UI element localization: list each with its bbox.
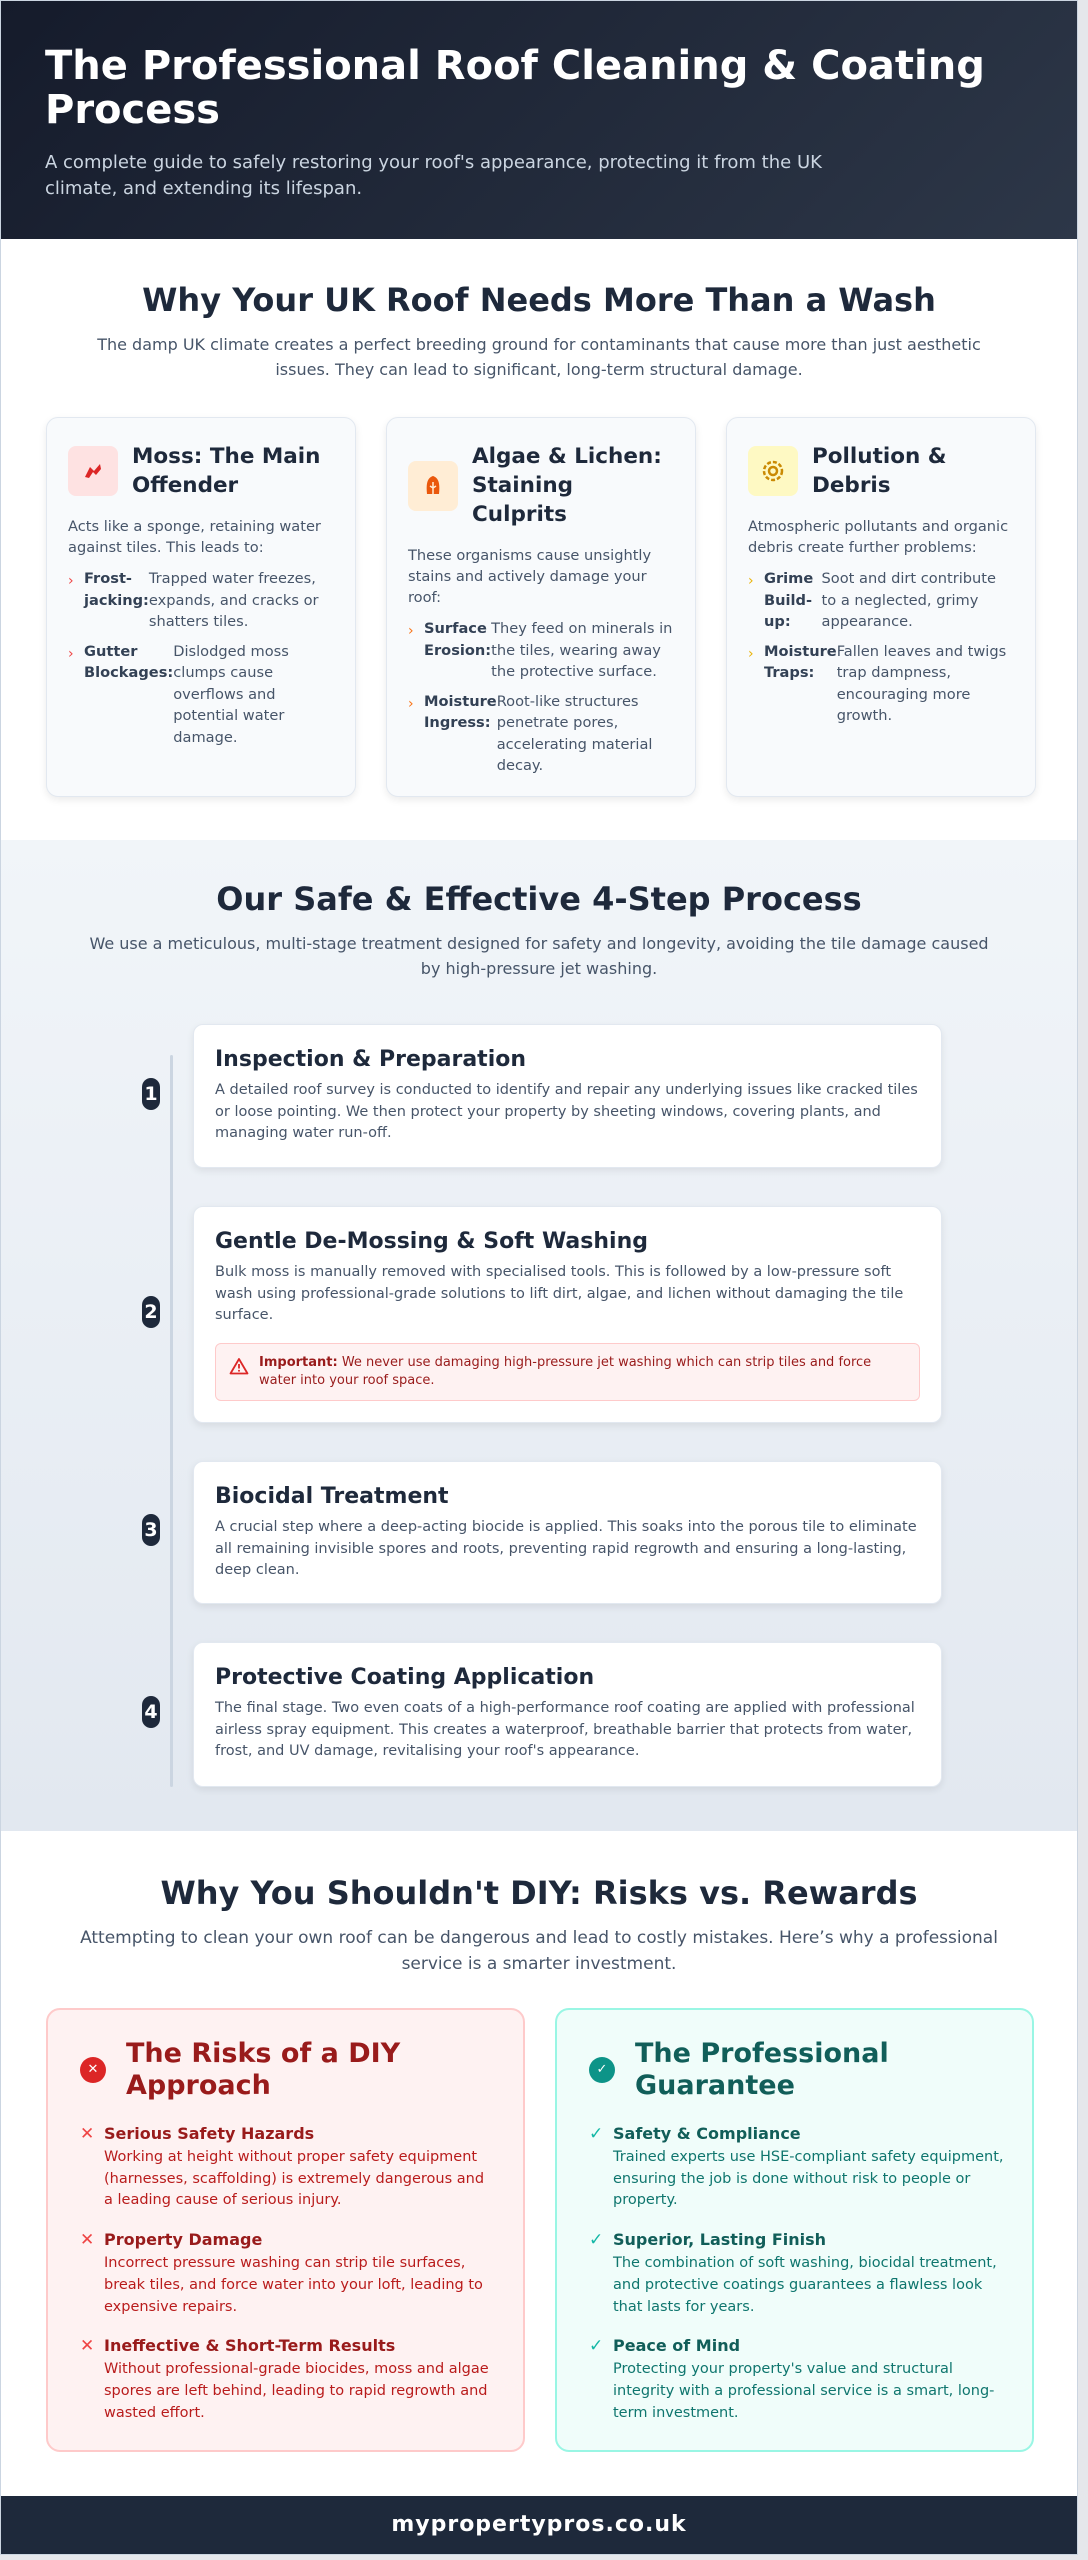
footer [1,2496,1077,2554]
title: The Professional Roof Cleaning & Coating Process [45,43,985,133]
card: algae: They feed on minerals in the tiles, wearing away the protective surface. [491,620,672,680]
card: moss: Frost-jacking: [84,570,149,608]
risk item: ✕ [80,2336,94,2356]
step 1 number: 1 [144,1083,158,1105]
risk item: Ineffective & Short-Term Results [104,2336,395,2355]
risk item: ✕ [80,2230,94,2250]
card: algae: Root-like structures penetrate pores, accelerating material decay. [497,692,652,774]
benefit item: Protecting your property's value and structural integrity with a professional service is a smart, long-term investment. [613,2361,994,2421]
risk item: Serious Safety Hazards [104,2124,314,2143]
risk item: Incorrect pressure washing can strip tile surfaces, break tiles, and force water into your loft, leading to expensive repairs. [104,2255,483,2315]
risk item: Working at height without proper safety equipment (harnesses, scaffolding) is extremely dangerous and a leading cause of serious injury. [104,2149,484,2208]
step 4 card: Protective Coating Application [215,1665,594,1690]
benefit item: ✓ [589,2124,603,2144]
callout: important warning: Important: We never use damaging high-pressure jet washing which can strip tiles and force water into your roof space. [259,1354,871,1388]
step 3 number [142,1514,160,1546]
step 2 number [142,1296,160,1328]
card: moss: › [68,646,74,662]
step 3 card: Biocidal Treatment [215,1484,449,1509]
step 1 number [142,1078,160,1110]
card: pollution: Soot and dirt contribute to a neglected, grimy appearance. [822,570,996,630]
card: moss [46,417,356,797]
subtitle: A complete guide to safely restoring your roof's appearance, protecting it from the UK climate, and extending its lifespan. [45,152,822,199]
benefit item [589,2230,997,2315]
panel: professional guarantee [555,2008,1034,2452]
panel: risks: The Risks of a DIY Approach [126,2038,400,2101]
card: algae: Algae & Lichen: Staining Culprits [472,444,662,527]
step 1 card: Inspection & Preparation [215,1047,526,1072]
icon: algae [408,460,458,510]
card: moss: Dislodged moss clumps cause overflows and potential water damage. [173,642,289,746]
card: pollution: › [748,646,754,662]
card: moss: Trapped water freezes, expands, and cracks or shatters tiles. [149,570,319,630]
risk item [80,2336,489,2421]
intro text: Attempting to clean your own roof can be dangerous and lead to costly mistakes. Here’s why a professional service is a smarter investment. [80,1928,998,1974]
header [1,1,1077,239]
card: pollution: Atmospheric pollutants and organic debris create further problems: [748,518,1008,556]
step 2 card: Bulk moss is manually removed with specialised tools. This is followed by a low-pressure soft wash using professional-grade solutions to lift dirt, algae, and lichen without damaging the tile surface. [215,1264,903,1323]
card: pollution: Moisture Traps: [764,642,837,681]
benefit item: Safety & Compliance [613,2124,801,2143]
step 3 card: A crucial step where a deep-acting biocide is applied. This soaks into the porous tile to eliminate all remaining invisible spores and roots, preventing rapid regrowth and ensuring a long-lasting, deep clean. [215,1519,917,1578]
timeline [142,1024,942,1790]
step 4 number: 4 [144,1701,158,1723]
card: pollution: Fallen leaves and twigs trap dampness, encouraging more growth. [837,642,1006,724]
section: 4-step process [1,840,1077,1831]
card: algae: › [408,696,414,712]
benefit item: Superior, Lasting Finish [613,2230,826,2249]
step 4 number [142,1696,160,1728]
section: DIY risks vs rewards [46,1874,1034,2452]
card: moss: Moss: The Main Offender [132,444,320,498]
card: pollution [726,417,1036,797]
benefit item: Peace of Mind [613,2336,740,2355]
step 2 card [193,1206,942,1423]
icon: check circle: ✓ [597,2062,607,2077]
step 2 card: Gentle De-Mossing & Soft Washing [215,1229,648,1254]
panel: risks [46,2008,525,2452]
card: moss: › [68,573,74,589]
icon: check circle [589,2057,615,2083]
intro text: The damp UK climate creates a perfect breeding ground for contaminants that cause more than just aesthetic issues. They can lead to significant, long-term structural damage. [97,335,981,379]
risk item [80,2230,483,2315]
risk item: Property Damage [104,2230,262,2249]
section: why your roof needs more [46,281,1036,800]
icon: x circle: ✕ [88,2062,98,2077]
icon: x circle [80,2057,106,2083]
risk item: Without professional-grade biocides, moss and algae spores are left behind, leading to rapid regrowth and wasted effort. [104,2361,489,2421]
card: algae: › [408,623,414,639]
intro text: We use a meticulous, multi-stage treatment designed for safety and longevity, avoiding the tile damage caused by high-pressure jet washing. [89,934,989,978]
step 3 number: 3 [144,1519,158,1541]
risk item [80,2124,484,2208]
card: moss: Acts like a sponge, retaining water against tiles. This leads to: [68,518,321,556]
callout: important warning [215,1342,920,1400]
card: algae: Surface Erosion: [424,620,491,658]
footer: mypropertypros.co.uk [391,2512,687,2537]
step 2 number: 2 [144,1301,158,1323]
heading: Why Your UK Roof Needs More Than a Wash [142,281,936,319]
benefit item [589,2336,994,2421]
benefit item: Trained experts use HSE-compliant safety equipment, ensuring the job is done without risk to people or property. [613,2149,1004,2208]
step 1 card [193,1024,942,1168]
card: moss: Gutter Blockages: [84,642,173,681]
card: pollution: Pollution & Debris [812,444,947,498]
benefit item [589,2124,1004,2208]
benefit item: The combination of soft washing, biocidal treatment, and protective coatings guarantees a flawless look that lasts for years. [613,2255,997,2315]
card: pollution: Grime Build-up: [764,570,813,630]
panel: professional guarantee: The Professional Guarantee [635,2038,889,2101]
icon: moss [68,446,118,496]
benefit item: ✓ [589,2336,603,2356]
icon: pollution [748,446,798,496]
step 4 card [193,1642,942,1787]
step 4 card: The final stage. Two even coats of a high-performance roof coating are applied with professional airless spray equipment. This creates a waterproof, breathable barrier that protects from water, frost, and UV damage, revitalising your roof's appearance. [215,1700,915,1759]
benefit item: ✓ [589,2230,603,2250]
heading: Why You Shouldn't DIY: Risks vs. Rewards [160,1874,918,1912]
step 3 card [193,1461,942,1604]
card: algae: Moisture Ingress: [424,692,497,731]
card: pollution: › [748,573,754,589]
cards row [46,417,1036,800]
risk item: ✕ [80,2124,94,2144]
card: algae: These organisms cause unsightly stains and actively damage your roof: [408,547,651,606]
heading: Our Safe & Effective 4-Step Process [216,880,862,918]
step 1 card: A detailed roof survey is conducted to identify and repair any underlying issues like cracked tiles or loose pointing. We then protect your property by sheeting windows, covering plants, and managing water run-off. [215,1082,918,1141]
card: algae [386,417,696,797]
